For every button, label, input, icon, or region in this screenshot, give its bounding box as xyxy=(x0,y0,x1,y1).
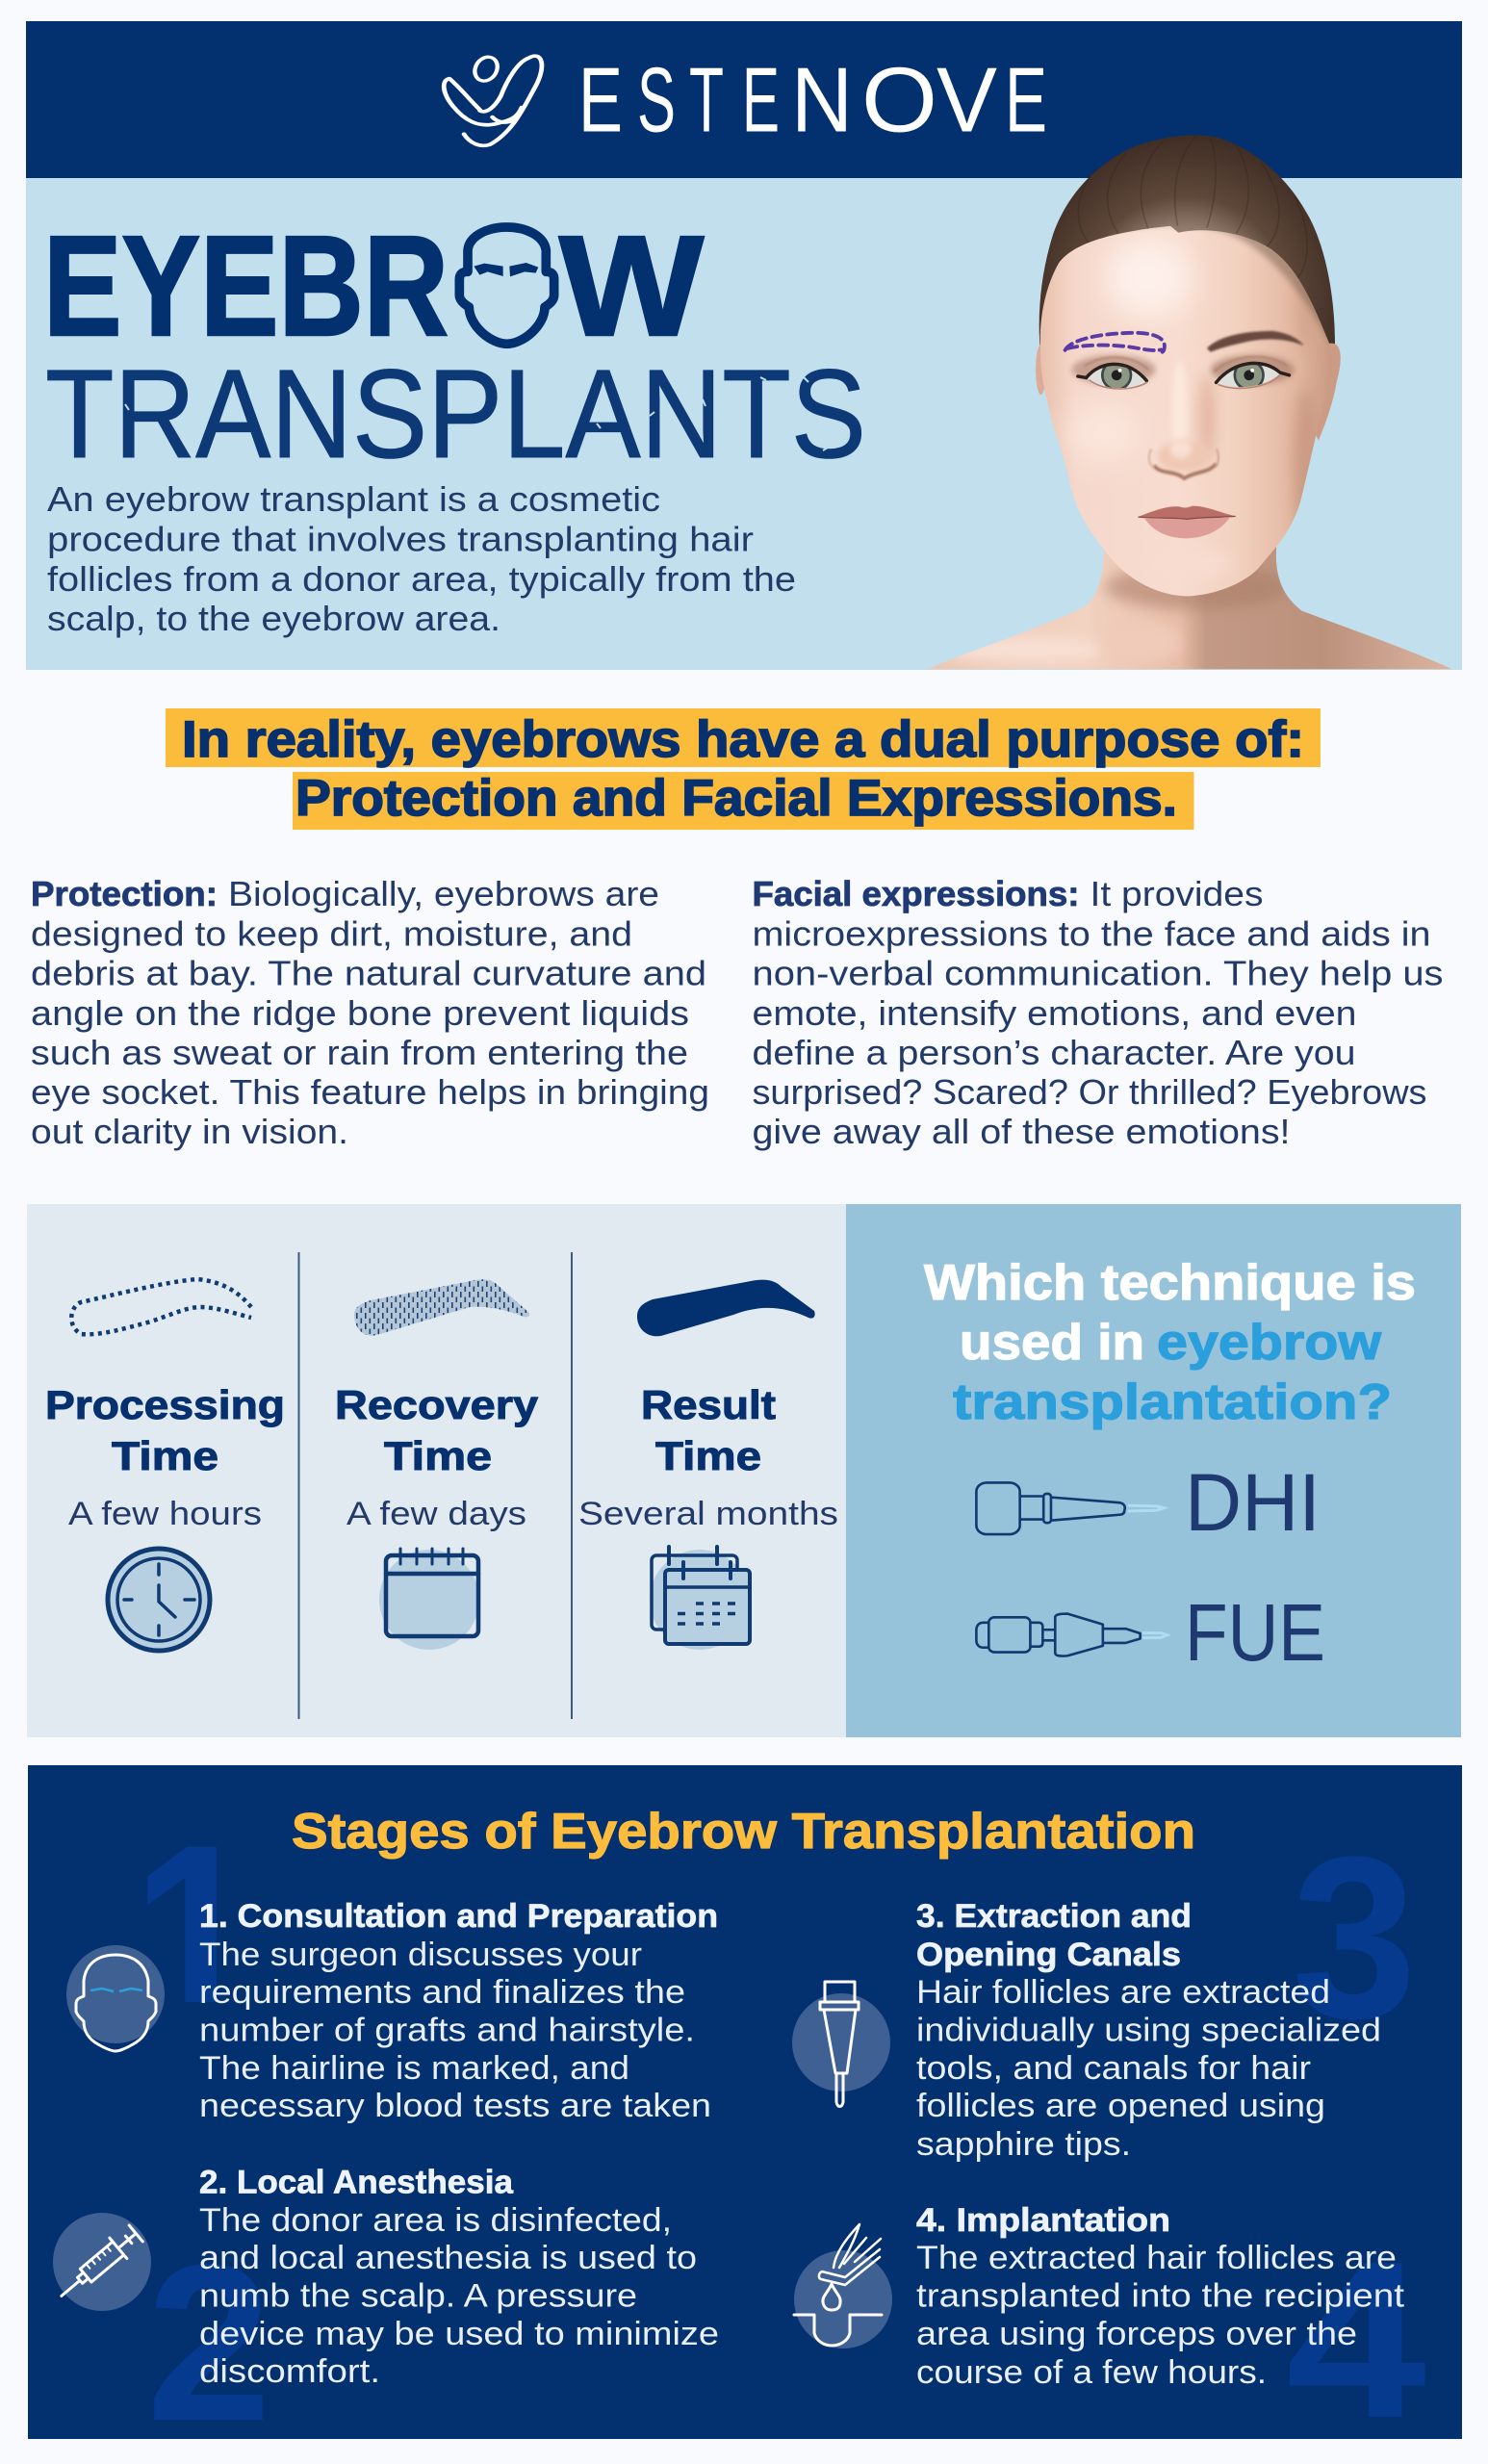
text: anesthesia: device may be used to minimize xyxy=(199,2316,719,2352)
text block: protection: Protection: xyxy=(31,874,218,913)
intro paragraph: scalp, to the eyebrow area. xyxy=(47,599,500,638)
question heading: eyebrow xyxy=(1157,1315,1382,1371)
face xyxy=(1040,208,1339,596)
hair xyxy=(1039,135,1335,355)
text: extraction: tools, and canals for hair xyxy=(916,2050,1311,2087)
text block: protection: designed to keep dirt, moisture, and xyxy=(31,914,632,953)
value: A few hours xyxy=(68,1496,262,1532)
text: implantation: transplanted into the recipient xyxy=(916,2278,1405,2315)
text block: facial expressions: microexpressions to the face and aids in xyxy=(753,914,1430,953)
callout: dual purpose: In reality, eyebrows have a dual purpose of: xyxy=(182,711,1304,768)
callout: dual purpose: Protection and Facial Expressions. xyxy=(295,770,1177,827)
text block: facial expressions: emote, intensify emotions, and even xyxy=(753,993,1357,1033)
text: implantation: area using forceps over the xyxy=(916,2316,1357,2352)
intro paragraph: An eyebrow transplant is a cosmetic xyxy=(47,479,660,519)
hero panel xyxy=(26,178,1462,670)
header band xyxy=(26,21,1462,178)
text: extraction: 3. Extraction and xyxy=(916,1898,1192,1935)
text: consultation: number of grafts and hairstyle. xyxy=(199,2013,695,2049)
brand name: O xyxy=(861,48,937,152)
text: extraction xyxy=(916,1898,1381,2163)
column: recovery time xyxy=(335,1279,539,1650)
stage 3 xyxy=(792,1898,1381,2163)
brand name: E xyxy=(578,48,623,152)
title: EYEBROW with head icon: EYEBR xyxy=(43,207,449,366)
brand name: T xyxy=(689,48,724,152)
brand name: N xyxy=(791,48,853,152)
icon: head with eyebrows xyxy=(459,227,554,344)
text: anesthesia: and local anesthesia is used to xyxy=(199,2240,697,2276)
text block: protection: out clarity in vision. xyxy=(31,1112,348,1151)
text: implantation: The extracted hair follicles are xyxy=(916,2240,1397,2276)
big number 2: 2 xyxy=(146,2219,271,2464)
heading: Time xyxy=(384,1433,492,1478)
column: result time xyxy=(578,1280,838,1650)
panel: technique xyxy=(846,1204,1461,1737)
text: anesthesia: discomfort. xyxy=(199,2353,380,2390)
intro paragraph: procedure that involves transplanting hair xyxy=(47,520,754,558)
big number 1: 1 xyxy=(132,1790,259,2086)
logo icon xyxy=(444,55,542,145)
label: DHI: DHI xyxy=(1185,1457,1321,1548)
heading: Recovery xyxy=(335,1382,539,1427)
callout: dual purpose xyxy=(166,708,1321,830)
heading: stages: Stages of Eyebrow Transplantation xyxy=(292,1804,1195,1860)
text: anesthesia: numb the scalp. A pressure xyxy=(199,2278,637,2315)
text: consultation: requirements and finalizes the xyxy=(199,1974,685,2011)
text: extraction: individually using specialized xyxy=(916,2013,1381,2049)
text block: protection xyxy=(31,874,709,1151)
icon: extraction tool xyxy=(792,1982,890,2106)
ears xyxy=(1036,344,1341,441)
text: extraction: Opening Canals xyxy=(916,1937,1181,1973)
text: consultation: 1. Consultation and Preparation xyxy=(199,1898,718,1935)
heading xyxy=(641,1382,776,1478)
text block: protection: such as sweat or rain from entering the xyxy=(31,1033,688,1072)
label: FUE: FUE xyxy=(1185,1587,1325,1678)
right eye xyxy=(1211,355,1295,390)
brand name: E xyxy=(742,48,780,152)
question heading: used in xyxy=(960,1315,1144,1371)
text: anesthesia: 2. Local Anesthesia xyxy=(199,2165,514,2201)
text block: protection: eye socket. This feature helps in bringing xyxy=(31,1072,709,1112)
column: processing time xyxy=(45,1279,285,1651)
question heading: Which technique is xyxy=(924,1255,1416,1311)
brand name: S xyxy=(637,48,676,152)
natural right eyebrow xyxy=(1207,331,1304,352)
text: implantation xyxy=(916,2202,1405,2391)
icon: calendar xyxy=(379,1549,479,1650)
left eye xyxy=(1071,355,1156,390)
text block: protection: angle on the ridge bone prevent liquids xyxy=(31,993,689,1033)
title: TRANSPLANTS: TRANSPLANTS xyxy=(45,343,866,484)
text block: facial expressions: non-verbal communication. They help us xyxy=(753,954,1444,993)
text block: facial expressions: give away all of these emotions! xyxy=(753,1112,1290,1151)
text block: facial expressions: surprised? Scared? Or thrilled? Eyebrows xyxy=(753,1072,1426,1112)
text: consultation xyxy=(199,1898,718,2124)
question heading: transplantation? xyxy=(953,1374,1392,1430)
text: consultation: The surgeon discusses your xyxy=(199,1937,642,1973)
big number 3: 3 xyxy=(1292,1809,1417,2066)
brand name: E xyxy=(1005,48,1047,152)
text block: facial expressions: It provides xyxy=(1090,874,1263,913)
panel: timeline xyxy=(27,1204,846,1737)
question heading xyxy=(924,1255,1416,1430)
icon: DHI pen xyxy=(976,1482,1164,1534)
dashed eyebrow marking xyxy=(1065,333,1165,352)
heading: Processing xyxy=(45,1382,285,1427)
text: consultation: The hairline is marked, and xyxy=(199,2050,629,2087)
text block: facial expressions xyxy=(753,874,1444,1151)
big number 4: 4 xyxy=(1286,2216,1426,2464)
text block: protection: Biologically, eyebrows are xyxy=(228,874,659,913)
brand name: V xyxy=(936,48,997,152)
icon: syringe xyxy=(53,2213,151,2311)
heading xyxy=(335,1382,539,1478)
icon: hatched eyebrow xyxy=(354,1279,529,1336)
value: A few days xyxy=(346,1496,526,1532)
text: extraction: sapphire tips. xyxy=(916,2126,1131,2163)
icon: dotted eyebrow outline xyxy=(71,1279,251,1334)
heading xyxy=(45,1382,285,1478)
heading: Result xyxy=(641,1382,776,1427)
icon: head xyxy=(66,1945,165,2051)
icon: clock xyxy=(108,1549,210,1651)
text: implantation: 4. Implantation xyxy=(916,2202,1170,2239)
photo: woman's face with marked eyebrow xyxy=(927,135,1452,669)
value: Several months xyxy=(578,1496,838,1532)
text block: facial expressions: define a person’s character. Are you xyxy=(753,1033,1355,1072)
neck and shoulders xyxy=(927,547,1452,669)
title: EYEBROW with head icon: W xyxy=(559,207,704,366)
heading: Time xyxy=(112,1433,218,1478)
text block: facial expressions: Facial expressions: xyxy=(753,874,1080,913)
icon: implantation xyxy=(794,2224,892,2348)
intro paragraph xyxy=(47,479,796,638)
text: extraction: Hair follicles are extracted xyxy=(916,1974,1330,2011)
panel: stages xyxy=(28,1765,1462,2464)
heading: Time xyxy=(655,1433,761,1478)
text: extraction: follicles are opened using xyxy=(916,2088,1325,2124)
stage 4 xyxy=(794,2202,1405,2391)
lips xyxy=(1138,506,1236,538)
text: implantation: course of a few hours. xyxy=(916,2354,1267,2391)
text: anesthesia xyxy=(199,2165,719,2390)
text: anesthesia: The donor area is disinfected, xyxy=(199,2202,672,2239)
nose xyxy=(1149,439,1219,478)
icon: calendars xyxy=(650,1547,750,1650)
text block: protection: debris at bay. The natural curvature and xyxy=(31,954,706,993)
icon: FUE punch xyxy=(976,1614,1167,1656)
stage 2 xyxy=(53,2165,719,2390)
icon: solid eyebrow xyxy=(637,1280,815,1336)
intro paragraph: follicles from a donor area, typically from the xyxy=(47,559,796,599)
text: consultation: necessary blood tests are taken xyxy=(199,2088,711,2124)
stage 1 xyxy=(66,1898,718,2124)
